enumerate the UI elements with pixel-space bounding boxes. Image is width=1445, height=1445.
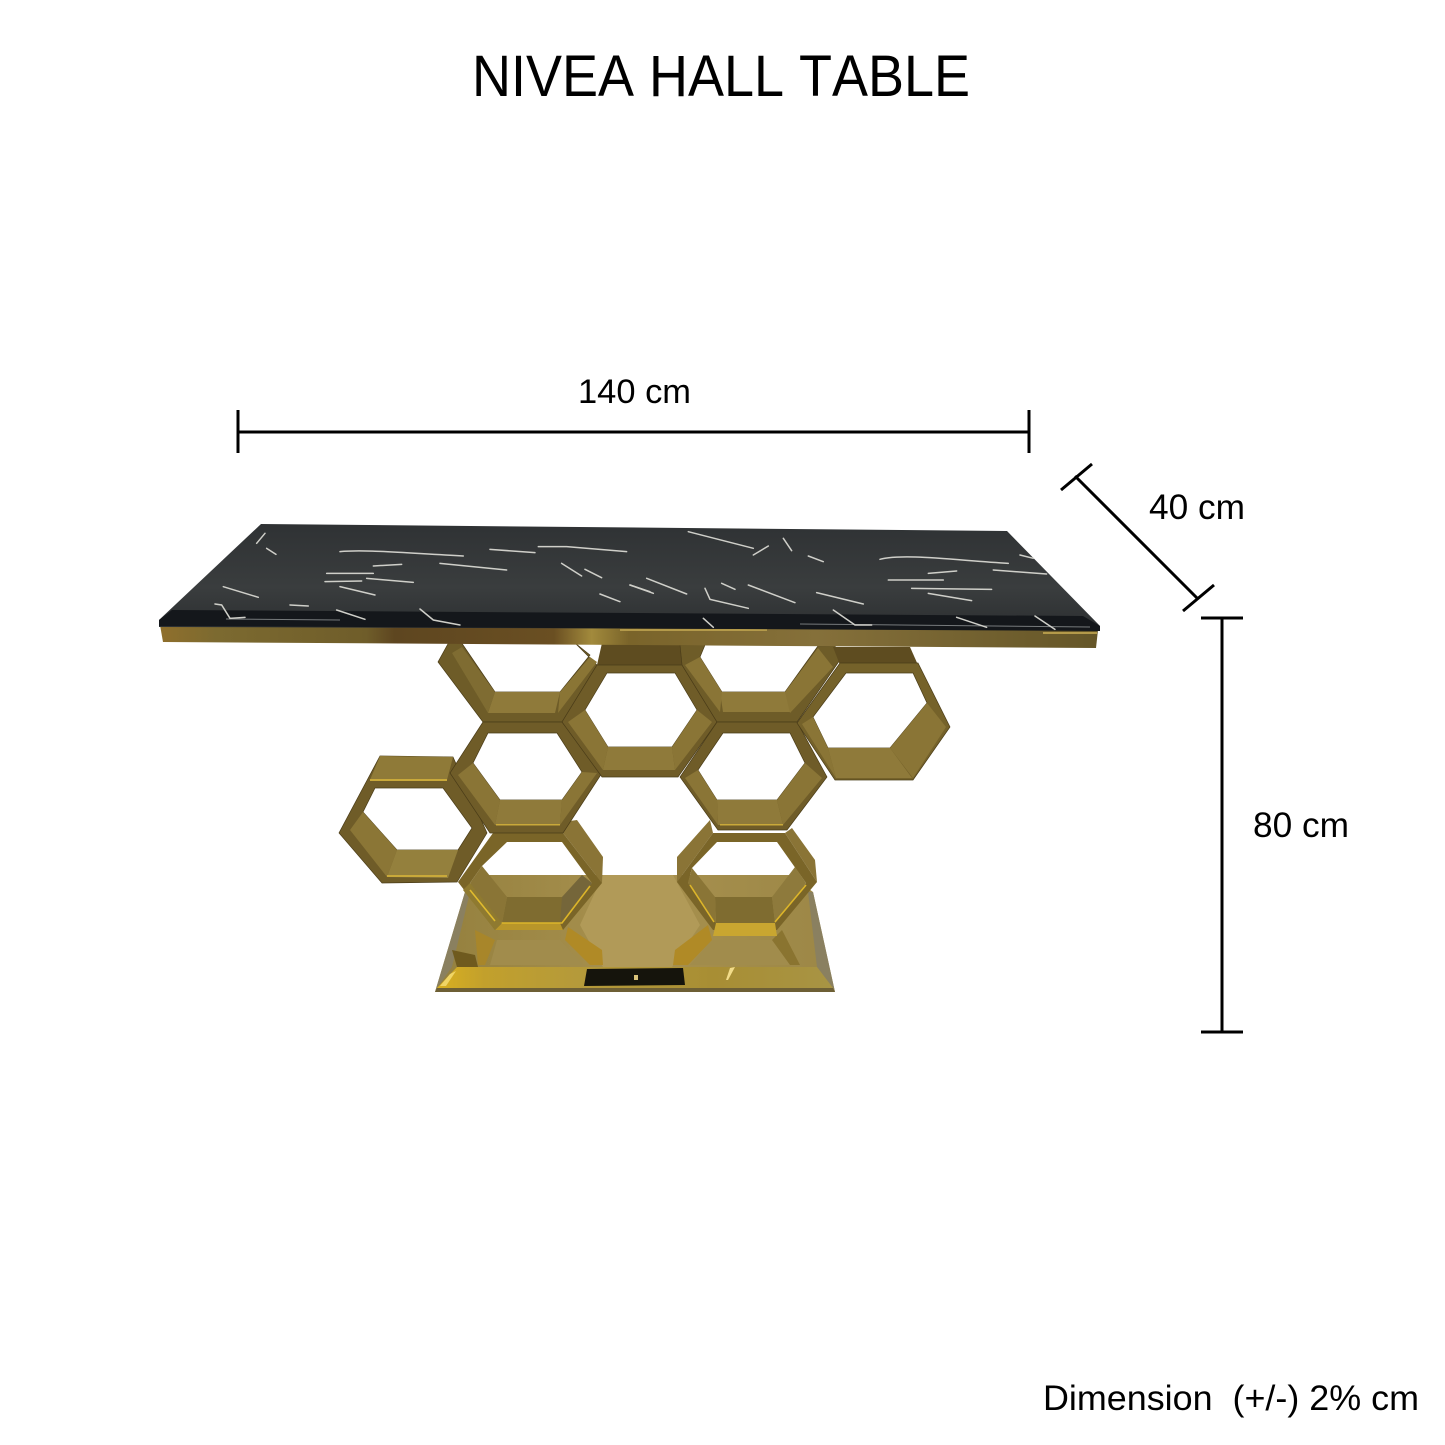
- depth label: 40 cm: [1149, 488, 1245, 527]
- width dimension: 140 cm: [238, 373, 1029, 453]
- hexagon: far left: [339, 756, 487, 883]
- width arrow: [238, 410, 1029, 453]
- hexagon: middle right: [680, 722, 827, 830]
- hexagon: far right: [797, 647, 950, 780]
- depth arrow: [1061, 464, 1214, 611]
- gold apron under the top: [160, 625, 1098, 648]
- marble table top: [159, 524, 1100, 648]
- gold base plinth: [435, 875, 835, 992]
- width label: 140 cm: [578, 373, 691, 411]
- hexagon: middle left: [450, 722, 602, 833]
- title: NIVEA HALL TABLE: [472, 44, 970, 109]
- tolerance note: Dimension (+/-) 2% cm: [1043, 1378, 1419, 1418]
- height arrow: [1201, 618, 1243, 1032]
- apron highlight lines: [620, 630, 1097, 633]
- table illustration: [159, 524, 1100, 992]
- bevelled front edge: [159, 610, 1100, 631]
- height dimension: 80 cm: [1201, 618, 1349, 1032]
- hexagon: lower left: [458, 820, 603, 930]
- top surface: [159, 524, 1100, 630]
- hexagon: top centre: [562, 643, 717, 777]
- hexagon: top right: [680, 645, 840, 722]
- height label: 80 cm: [1253, 806, 1349, 845]
- marble veins, left: [215, 533, 650, 625]
- front edge sheen: [226, 619, 1090, 627]
- hexagon: lower right: [677, 820, 817, 936]
- marble veins, right: [630, 532, 1055, 629]
- depth dimension: 40 cm: [1061, 464, 1245, 611]
- hexagon: top left: [438, 642, 597, 722]
